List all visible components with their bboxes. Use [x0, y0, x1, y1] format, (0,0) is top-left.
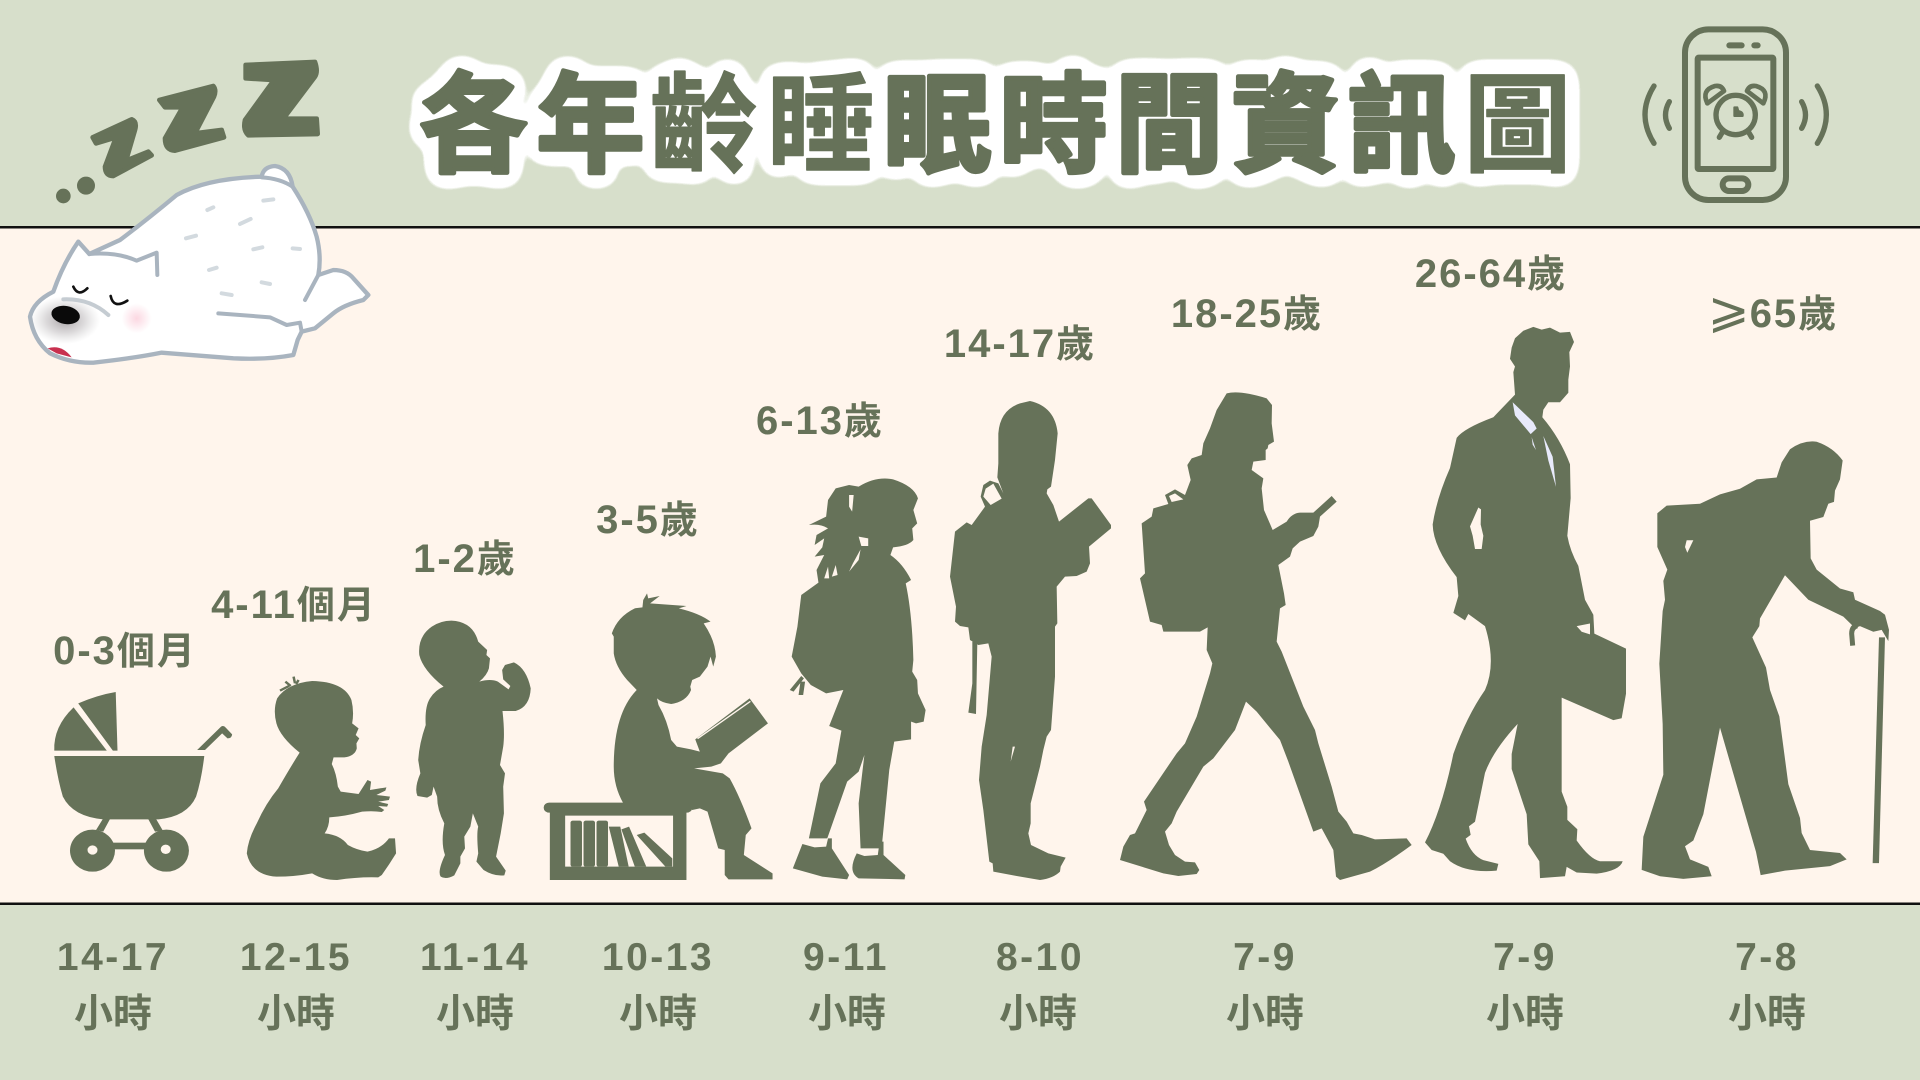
sleep hours: 14-17: 14-17: [57, 936, 169, 979]
sleep hours: 12-15: [240, 936, 352, 1036]
label: 1-2 years: 1-2歲: [413, 537, 517, 581]
sleep hours: 14-17: [57, 936, 169, 1036]
sleep hours: 11-14: 11-14: [420, 936, 530, 979]
silhouette: boy reading on book crate: [544, 593, 773, 880]
sleep hours: 10-13: 小時: [619, 993, 697, 1036]
sleep hours: 7-9 young adult: 7-9: [1233, 936, 1297, 979]
sleep hours: 14-17: 小時: [74, 993, 152, 1036]
sleep hours: 8-10: 小時: [999, 993, 1077, 1036]
middle panel: [0, 227, 1920, 904]
sleep hours: 12-15: 小時: [257, 993, 335, 1036]
label: 26-64 years: 26-64歲: [1415, 252, 1567, 296]
silhouette: young woman with phone: [1120, 392, 1412, 880]
label: 18-25 years: 18-25歲: [1171, 292, 1323, 336]
silhouette: man in suit with briefcase: [1425, 327, 1626, 878]
sleep hours: 7-8: 7-8: [1735, 936, 1799, 979]
label: 3-5 years: 3-5歲: [596, 498, 700, 542]
sleep hours: 12-15: 12-15: [240, 936, 352, 979]
sleep hours: 7-8: 小時: [1728, 993, 1806, 1036]
header band: [0, 0, 1920, 227]
silhouette: girl with backpack: [790, 479, 926, 879]
sleep hours: 10-13: 10-13: [602, 936, 714, 979]
sleep hours: 7-8: [1728, 936, 1806, 1036]
sleep hours: 11-14: [420, 936, 530, 1036]
sleep hours: 8-10: [996, 936, 1084, 1036]
label: 4-11 months: 4-11個月: [211, 583, 377, 627]
label: 14-17 years: 14-17歲: [944, 322, 1096, 366]
title: 各年齡睡眠時間資訊圖: [420, 39, 1572, 195]
silhouette: teenager with book: [950, 401, 1111, 880]
sleep hours: 7-9 young adult: [1226, 936, 1304, 1036]
label: 6-13 years: 6-13歲: [756, 399, 884, 443]
sleeping letters zzz: [58, 62, 318, 201]
sleep hours: 9-11: 9-11: [803, 936, 889, 979]
sleep hours: 8-10: 8-10: [996, 936, 1084, 979]
sleep hours: 7-9 young adult: 小時: [1226, 993, 1304, 1036]
sleep hours: 7-9 adult: [1486, 936, 1564, 1036]
sleep hours: 7-9 adult: 小時: [1486, 993, 1564, 1036]
label: 65 years and over: ⩾65歲: [1708, 282, 1838, 338]
footer band: [0, 904, 1920, 1080]
sleep hours: 9-11: [803, 936, 889, 1036]
sleep hours: 7-9 adult: 7-9: [1493, 936, 1557, 979]
silhouette: sitting baby: [247, 677, 396, 880]
icon: stroller: [54, 692, 232, 872]
sleep hours: 11-14: 小時: [436, 993, 514, 1036]
silhouette: elderly person with cane: [1642, 441, 1889, 879]
sleep hours: 9-11: 小時: [808, 993, 886, 1036]
illustration: sleeping polar bear: [30, 166, 368, 363]
icon: phone with alarm clock: [1645, 29, 1826, 200]
sleep hours: 10-13: [602, 936, 714, 1036]
label: 0-3 months: 0-3個月: [53, 629, 197, 673]
silhouette: standing toddler: [416, 621, 531, 878]
